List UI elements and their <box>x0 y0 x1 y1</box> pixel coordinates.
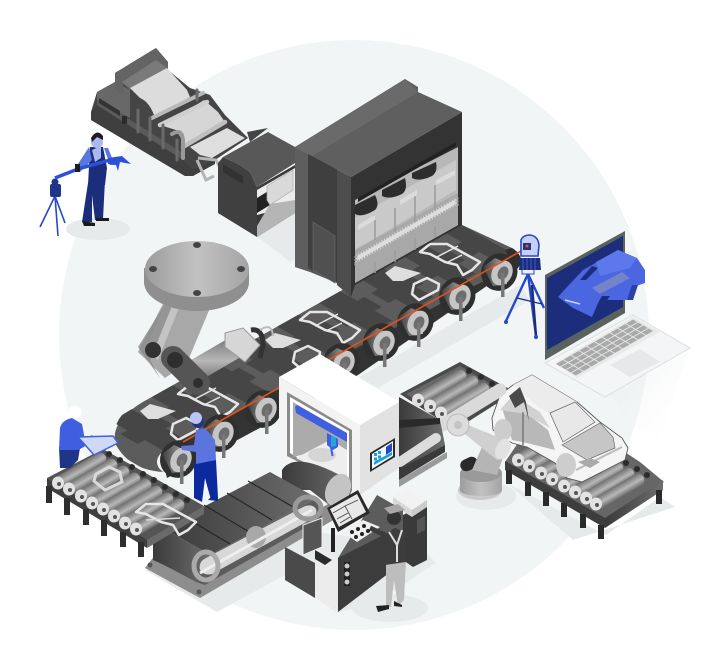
second machine <box>218 128 295 237</box>
car body <box>492 375 628 482</box>
drum <box>282 462 352 515</box>
stamping press <box>295 79 462 297</box>
torso <box>88 147 107 185</box>
background circle <box>59 40 649 630</box>
hanging panel <box>303 518 322 555</box>
keyboard <box>556 320 653 376</box>
laptop <box>545 231 690 397</box>
worker: inspector left of table <box>59 406 118 468</box>
arm tripod <box>40 196 65 236</box>
link arm <box>173 358 198 383</box>
welding robot <box>443 387 529 500</box>
belt top surface <box>115 224 519 472</box>
conveyor exit behind inspection machine <box>399 397 447 487</box>
laptop base <box>545 315 690 397</box>
laser scanner tripod <box>504 235 544 339</box>
status display <box>370 438 395 472</box>
console <box>285 488 427 612</box>
cylinder arm <box>186 335 244 382</box>
monitor <box>327 490 370 552</box>
worker: blue hat at belt <box>181 412 218 502</box>
console top <box>338 495 403 580</box>
upper-right roller table <box>400 362 515 430</box>
interior apparatus <box>267 170 293 205</box>
parts on table <box>94 467 196 535</box>
paper sheets <box>130 68 245 158</box>
overhead robot arm <box>138 241 273 388</box>
machine window <box>287 392 352 490</box>
screen <box>545 231 625 360</box>
inspection machine <box>279 354 399 495</box>
press dies <box>355 162 436 215</box>
left roller table <box>46 449 204 557</box>
gantry <box>295 405 347 442</box>
printing machine <box>91 48 248 180</box>
car parts on belt <box>140 244 480 440</box>
disc <box>144 268 249 311</box>
worker: measuring arm operator <box>40 132 131 236</box>
keypad <box>343 520 380 542</box>
lower conveyor <box>145 462 356 598</box>
touchpad <box>610 349 660 377</box>
press interior <box>355 147 458 283</box>
lower-right roller table <box>505 427 664 539</box>
tool <box>55 160 110 178</box>
belt side <box>196 498 322 585</box>
legs <box>82 180 105 222</box>
conveyor belt main <box>103 217 528 484</box>
belt underside <box>160 257 520 478</box>
rollers <box>138 90 225 160</box>
floor shadows <box>66 213 675 622</box>
blue car <box>558 250 645 317</box>
laptop shadow <box>610 352 688 440</box>
lower conveyor base <box>145 500 342 598</box>
drive rollers <box>153 247 524 484</box>
console right block <box>403 503 427 567</box>
laser line <box>183 247 528 442</box>
linkage <box>197 158 225 180</box>
belt slats <box>163 472 317 555</box>
worker: operator <box>370 504 406 612</box>
